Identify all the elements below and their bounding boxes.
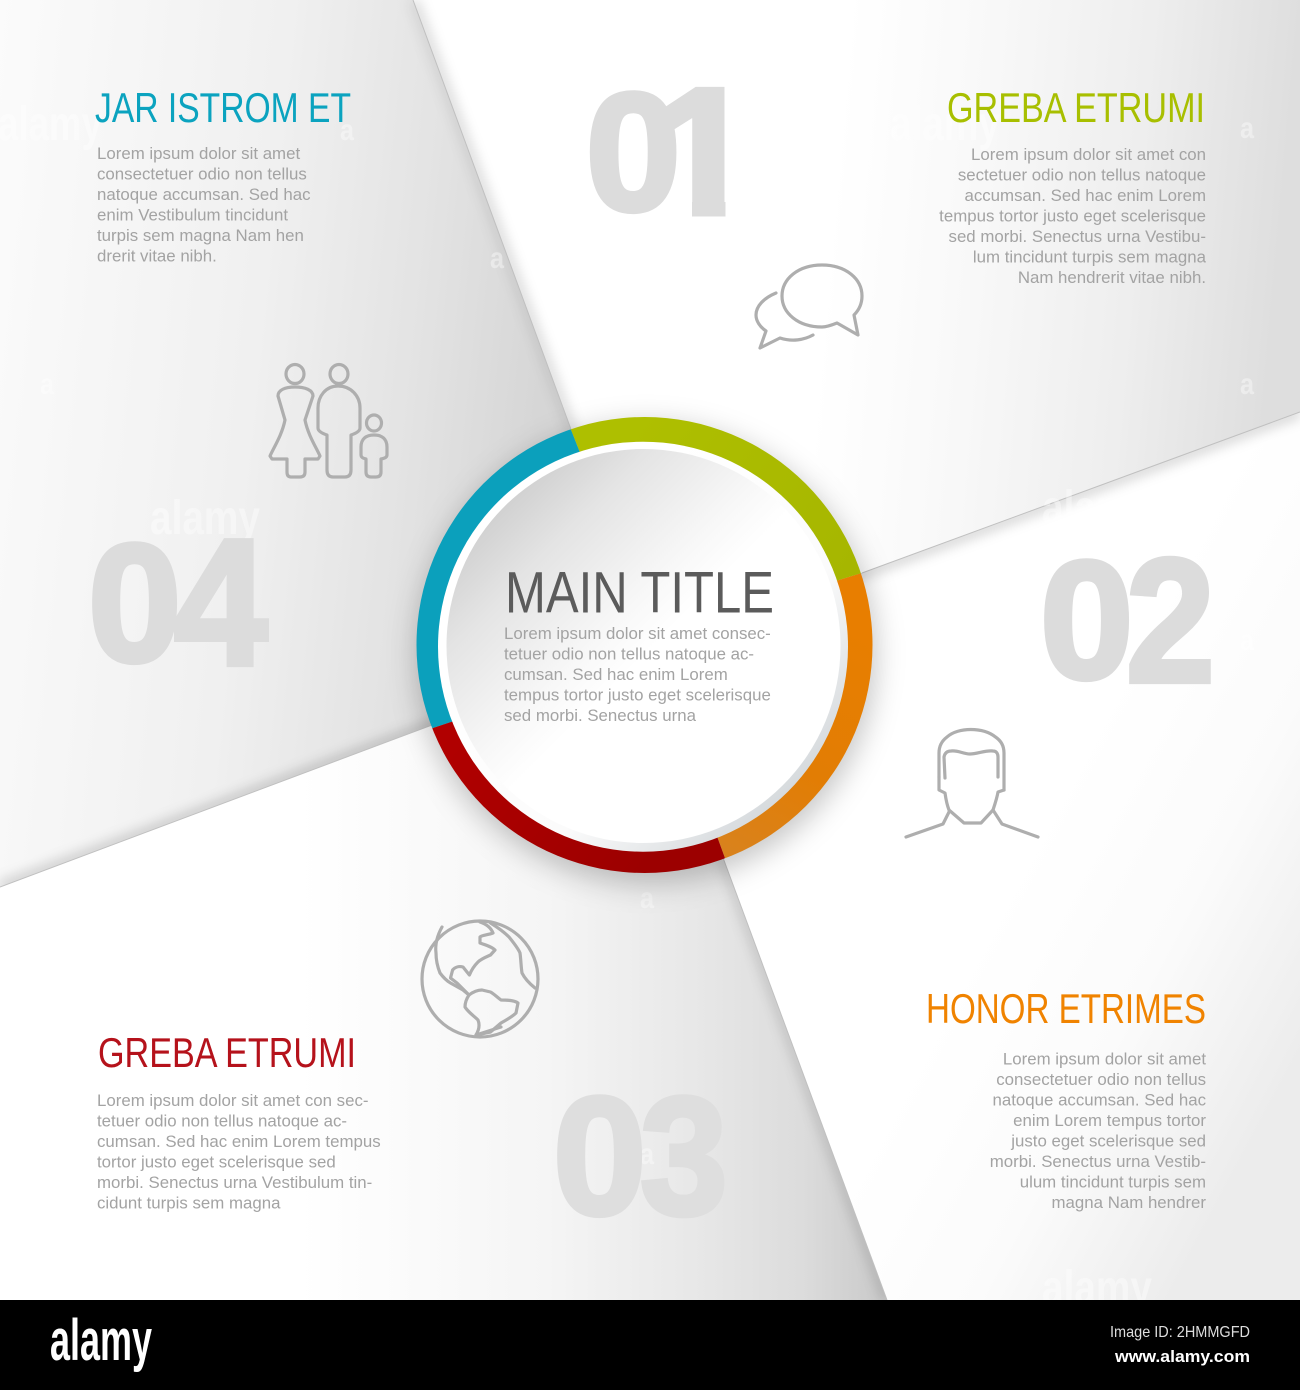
ring segment: orange [718,573,872,858]
icon: family [270,364,387,477]
title: MAIN TITLE: MAIN TITLE [505,560,774,626]
body text: JAR ISTROM ET: Lorem ipsum dolor sit amet [97,144,300,163]
text block: GREBA ETRUMI (green) [939,84,1207,287]
icon: speech bubbles [756,265,862,348]
colored ring [416,417,872,873]
body text: HONOR ETRIMES: consectetuer odio non tellus [996,1070,1206,1089]
body text: GREBA ETRUMI green: accumsan. Sed hac enim Lorem [964,186,1206,205]
panel: bottom-left sheet (background) [0,722,886,1300]
main circle [403,410,890,898]
body text: JAR ISTROM ET: turpis sem magna Nam hen [97,226,304,245]
body text: JAR ISTROM ET: consectetuer odio non tellus [97,164,307,184]
number 04 [88,502,267,703]
body text: GREBA ETRUMI red: tetuer odio non tellus natoque ac- [97,1112,347,1130]
watermark: faint stock marks: alamy [890,98,1000,151]
number 01 [590,86,726,216]
body text: GREBA ETRUMI green: sed morbi. Senectus urna Vestibu- [949,227,1206,246]
body text: GREBA ETRUMI green: sectetuer odio non tellus natoque [958,166,1206,184]
watermark: faint stock marks: alamy [150,492,260,545]
body text: GREBA ETRUMI red: cidunt turpis sem magna [97,1194,281,1212]
body text: HONOR ETRIMES: Lorem ipsum dolor sit amet [1003,1050,1206,1068]
body text: HONOR ETRIMES: enim Lorem tempus tortor [1013,1111,1206,1130]
body text: GREBA ETRUMI red [97,1091,381,1212]
body text: GREBA ETRUMI green: lum tincidunt turpis sem magna [973,248,1207,266]
watermark: faint stock marks: a [640,1138,654,1171]
body text: HONOR ETRIMES: justo eget scelerisque sed [1010,1132,1206,1150]
watermark: faint stock marks: a [490,242,504,275]
number 02: 0 [1040,526,1133,714]
body text: center [504,624,771,725]
text block: JAR ISTROM ET [95,84,351,266]
heading: GREBA ETRUMI green: GREBA ETRUMI [947,84,1205,131]
watermark: faint stock marks: alamy [1042,482,1152,535]
footer logo: alamy [50,1308,152,1373]
watermark: faint stock marks: alamy [1042,1262,1152,1315]
ring segment: green [570,417,861,580]
ring segment: red [432,722,725,873]
image id: Image ID: 2HMMGFD [1110,1324,1250,1341]
body text: GREBA ETRUMI red: morbi. Senectus urna Vestibulum tin- [97,1173,372,1192]
watermark: faint stock marks: alamy [0,98,102,151]
number 03 [553,1061,728,1250]
body text: GREBA ETRUMI red: Lorem ipsum dolor sit amet con sec- [97,1091,368,1110]
body text: JAR ISTROM ET: enim Vestibulum tincidunt [97,206,288,224]
watermark: faint stock marks: a [1240,368,1254,401]
number 02 [1040,522,1215,719]
text block: GREBA ETRUMI (red) [97,1029,381,1212]
ring segment: blue [416,429,580,728]
number 03: 0 [553,1062,646,1250]
body text: HONOR ETRIMES: natoque accumsan. Sed hac [992,1090,1206,1110]
watermark: faint stock marks: a [340,114,354,147]
body text: center: cumsan. Sed hac enim Lorem [504,665,728,684]
watermark: faint stock marks: a [40,368,54,401]
body text: HONOR ETRIMES: magna Nam hendrer [1052,1193,1206,1212]
body text: GREBA ETRUMI green: tempus tortor justo eget scelerisque [939,206,1206,226]
body text: GREBA ETRUMI green: Nam hendrerit vitae nibh. [1018,268,1206,287]
body text: JAR ISTROM ET: drerit vitae nibh. [97,246,217,266]
center text block [504,560,774,725]
ring shadow [416,424,876,884]
watermark: faint stock marks: a [640,882,654,915]
body text: HONOR ETRIMES: ulum tincidunt turpis sem [1020,1172,1206,1192]
body text: HONOR ETRIMES: morbi. Senectus urna Vestib- [990,1152,1206,1171]
body text: GREBA ETRUMI red: cumsan. Sed hac enim Lorem tempus [97,1132,381,1151]
watermark: faint stock marks [352,122,1254,511]
body text: center: tempus tortor justo eget scelerisque [504,686,771,704]
heading: HONOR ETRIMES: HONOR ETRIMES [926,985,1206,1032]
body text: GREBA ETRUMI green: Lorem ipsum dolor sit amet con [971,145,1206,164]
icon: globe [422,921,538,1037]
watermark: faint stock marks: a [1240,112,1254,145]
inner disc [446,449,840,843]
number 03: 3 [640,1061,728,1250]
body text: JAR ISTROM ET: natoque accumsan. Sed hac [97,185,310,204]
heading: GREBA ETRUMI red: GREBA ETRUMI [98,1029,356,1076]
text block: HONOR ETRIMES [926,985,1206,1212]
watermark: faint stock marks: a [1240,624,1254,657]
number 04: 4 [174,502,267,703]
white rim [438,442,848,852]
body text: GREBA ETRUMI red: tortor justo eget scelerisque sed [97,1152,336,1172]
number 02: 2 [1126,522,1215,719]
number 01: 0 [586,58,681,246]
icon: man portrait [906,730,1038,837]
body text: JAR ISTROM ET [97,144,310,266]
body text: center: tetuer odio non tellus natoque ac- [504,644,754,664]
body text: GREBA ETRUMI green [939,145,1207,287]
number 04: 0 [88,509,181,697]
body text: center: Lorem ipsum dolor sit amet consec- [504,624,771,643]
body text: center: sed morbi. Senectus urna [504,706,697,725]
body text: HONOR ETRIMES [990,1050,1206,1212]
panel: bottom-right sheet (background) [718,412,1300,1300]
website: www.alamy.com [1114,1347,1250,1366]
number 01: 1 [650,48,757,267]
footer band [0,1300,1300,1390]
heading: JAR ISTROM ET: JAR ISTROM ET [95,84,351,131]
panel: top-right sheet (background) [413,0,1300,645]
panel: top-left sheet (background) [0,0,574,886]
